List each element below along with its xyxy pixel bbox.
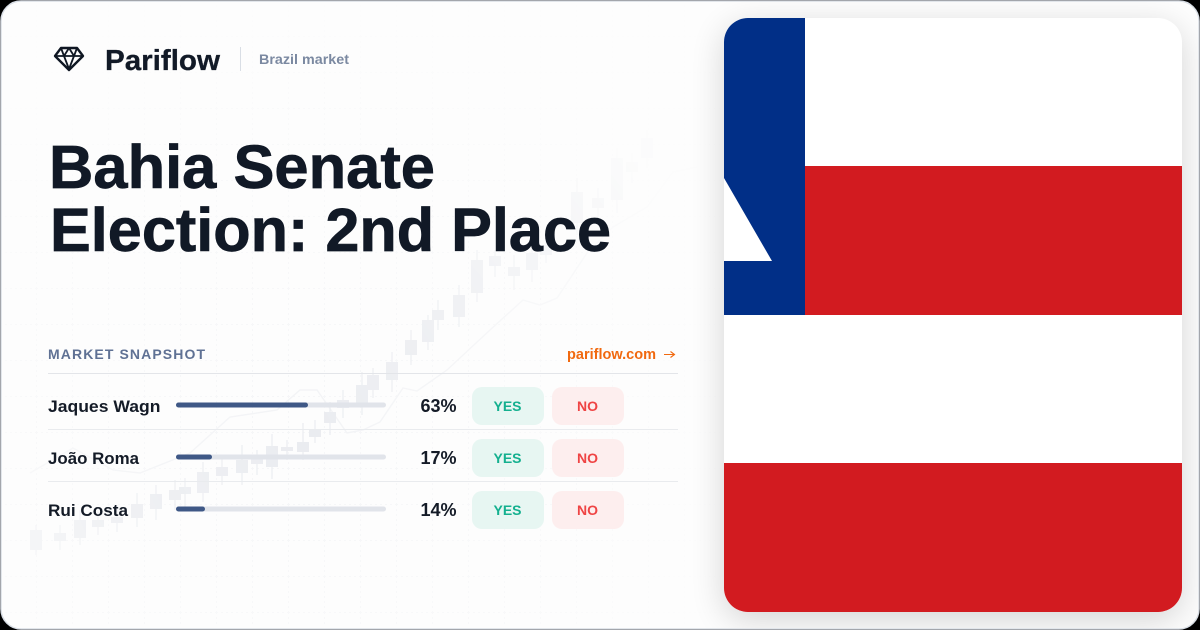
flag of Bahia bbox=[724, 18, 1182, 612]
panel: market snapshot bbox=[48, 346, 678, 529]
red stripe upper bbox=[805, 166, 1182, 315]
title: Election: 2nd Place bbox=[50, 196, 611, 264]
row: Rui Costa: Rui Costa bbox=[48, 501, 129, 520]
row: Jaques Wagner: YES bbox=[493, 398, 522, 414]
row: Rui Costa: 14% bbox=[420, 500, 456, 520]
row: João Roma: João Roma bbox=[48, 449, 140, 468]
row: João Roma: 17% bbox=[420, 448, 456, 468]
site link with arrow: pariflow.com bbox=[567, 346, 656, 363]
section label: MARKET SNAPSHOT bbox=[48, 346, 205, 362]
white triangle bbox=[724, 178, 772, 261]
row: Rui Costa bbox=[48, 491, 624, 529]
background chart: faint grid, candlesticks and trend line bbox=[30, 250, 538, 555]
row: Jaques Wagner bbox=[48, 387, 624, 425]
row: Jaques Wagner: 63% bbox=[420, 396, 456, 416]
title bbox=[49, 133, 611, 264]
row: Jaques Wagner: NO bbox=[577, 398, 598, 414]
row: Rui Costa: YES bbox=[493, 502, 522, 518]
blue canton bbox=[724, 18, 805, 315]
brand name: Pariflow bbox=[105, 45, 220, 77]
row: João Roma bbox=[48, 439, 624, 477]
row: João Roma: NO bbox=[577, 450, 598, 466]
market tag: Brazil market bbox=[259, 51, 349, 67]
header divider bbox=[240, 47, 241, 71]
title: Bahia Senate bbox=[49, 133, 435, 201]
brand header bbox=[55, 45, 349, 77]
icon: diamond logo bbox=[55, 48, 83, 70]
flag shadow bbox=[724, 26, 1182, 620]
row: Jaques Wagner: Jaques Wagner bbox=[48, 397, 177, 416]
row: Rui Costa: NO bbox=[577, 502, 598, 518]
row: João Roma: YES bbox=[493, 450, 522, 466]
red stripe lower bbox=[724, 463, 1182, 612]
